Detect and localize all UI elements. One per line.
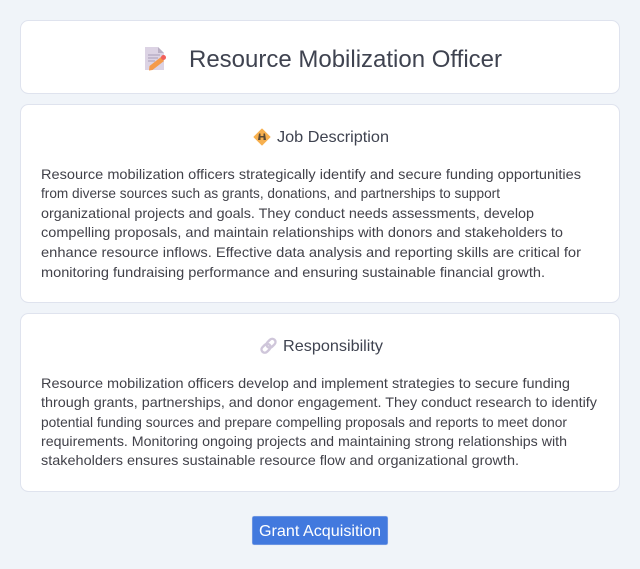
panel: job description: [20, 104, 620, 302]
text block: responsibility: Resource mobilization officers develop and implement strategies to secure funding: [41, 375, 570, 391]
text block: job description: from diverse sources such as grants, donations, and partnerships to support: [41, 185, 500, 201]
icon: road sign diamond: [254, 129, 270, 145]
text block: responsibility: stakeholders ensures sustainable resource flow and organizational growth.: [41, 452, 519, 468]
text block: responsibility: potential funding sources and prepare compelling proposals and reports to meet donor: [41, 414, 567, 430]
text block: responsibility: requirements. Monitoring ongoing projects and maintaining strong relationships with: [41, 433, 567, 449]
text block: job description: Resource mobilization officers strategically identify and secure funding opportunities: [41, 166, 581, 182]
title text: Resource Mobilization Officer: [189, 46, 502, 73]
icon: chain link: [260, 337, 277, 354]
panel: responsibility: [20, 314, 620, 492]
text block: job description: compelling proposals, and maintain relationships with donors and stakeholders to: [41, 224, 563, 240]
text block: responsibility: [41, 375, 597, 468]
icon: document with pencil: [145, 47, 166, 70]
text block: responsibility: through grants, partnerships, and donor engagement. They conduct research to identify: [41, 394, 597, 410]
panel: title: [20, 20, 620, 94]
text block: job description: monitoring fundraising performance and ensuring sustainable financial growth.: [41, 264, 545, 280]
text block: job description: enhance resource inflows. Effective data analysis and reporting skills are critical for: [41, 244, 581, 260]
tag button: Grant Acquisition: Grant Acquisition: [259, 523, 381, 540]
text block: job description: organizational projects and goals. They conduct needs assessments, develop: [41, 205, 534, 221]
heading: responsibility: Responsibility: [283, 338, 383, 355]
heading: job description: Job Description: [277, 129, 389, 146]
text block: job description: [41, 166, 581, 280]
tag button: Grant Acquisition: [252, 516, 388, 545]
